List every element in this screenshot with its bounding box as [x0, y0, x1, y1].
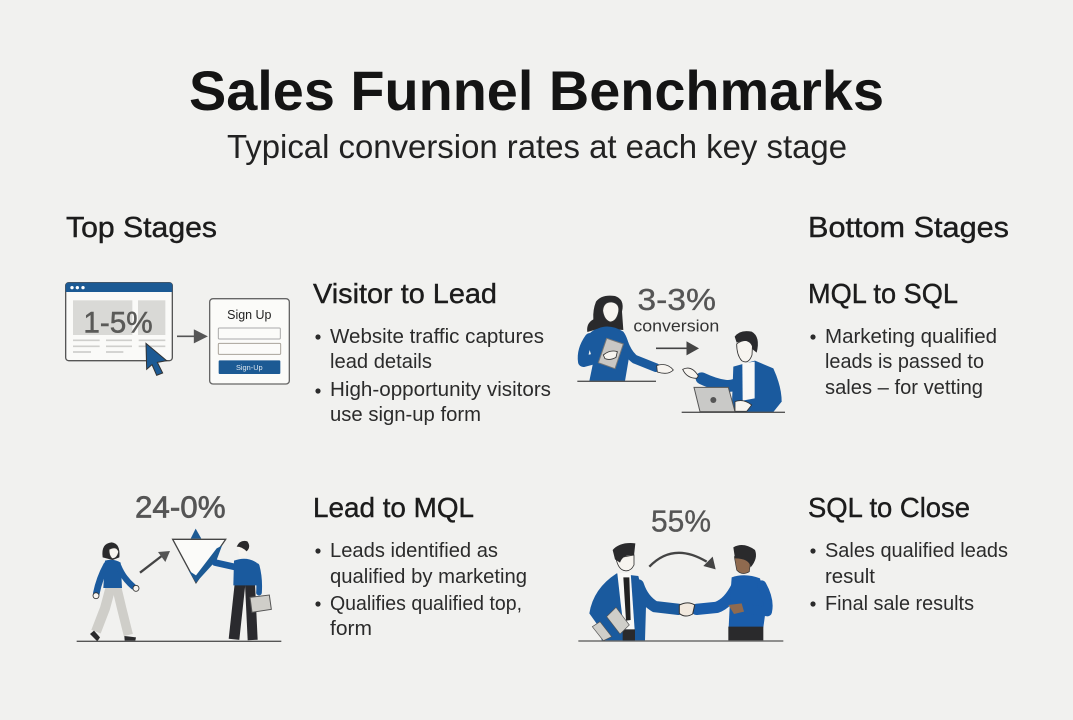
illustration: closing handshake — [578, 505, 783, 641]
text block: SQL to close: result — [825, 565, 875, 588]
text block: visitor to lead: Website traffic captures — [330, 325, 544, 348]
arrow — [177, 331, 206, 342]
text block: SQL to close — [808, 492, 1008, 615]
text block: lead to MQL: Leads identified as — [330, 539, 498, 562]
label: conversion: conversion — [633, 317, 719, 336]
text block: MQL to SQL: Marketing qualified — [825, 325, 997, 348]
icon: cursor — [146, 343, 167, 375]
stat: 3-3%: 3-3% — [637, 283, 716, 317]
text block: SQL to close: Final sale results — [825, 592, 974, 615]
text block: visitor to lead: use sign-up form — [330, 403, 481, 426]
illustration: lead qualification — [77, 490, 281, 641]
woman walking — [90, 542, 139, 641]
text block: lead to MQL: form — [330, 617, 372, 640]
arrow — [656, 343, 697, 354]
man with briefcase — [77, 541, 281, 641]
text block: visitor to lead: High-opportunity visitors — [330, 378, 551, 401]
man figure with laptop — [682, 331, 785, 412]
customer figure — [697, 545, 768, 640]
text block: MQL to SQL: MQL to SQL — [808, 278, 958, 309]
text block: SQL to close: Sales qualified leads — [825, 539, 1008, 562]
sign-up form card: Sign Up — [227, 308, 271, 322]
stat: 1-5%: 1-5% — [83, 307, 153, 340]
illustration: MQL handoff — [577, 283, 785, 412]
text block: SQL to close: SQL to Close — [808, 492, 970, 523]
icon: browser to sign-up form — [66, 283, 289, 384]
sign-up form card: Sign-Up — [236, 363, 263, 372]
text block: visitor to lead: lead details — [330, 350, 432, 373]
subtitle: Typical conversion rates at each key stage — [227, 128, 847, 165]
browser window — [66, 283, 172, 361]
text block: MQL to SQL: leads is passed to — [825, 350, 984, 373]
heading: bottom stages: Bottom Stages — [808, 212, 1009, 244]
handshake — [679, 603, 695, 616]
arrow — [140, 556, 162, 573]
salesman figure — [589, 543, 679, 641]
text block: lead to MQL: Lead to MQL — [313, 492, 474, 523]
text block: visitor to lead — [313, 278, 551, 426]
text block: lead to MQL: qualified by marketing — [330, 565, 527, 588]
woman figure — [577, 296, 673, 381]
text block: MQL to SQL — [808, 278, 997, 399]
funnel with check — [173, 529, 226, 583]
heading: top stages: Top Stages — [66, 212, 217, 244]
stat: 55%: 55% — [651, 505, 711, 539]
text block: visitor to lead: Visitor to Lead — [313, 278, 497, 309]
sign-up form card — [210, 299, 289, 384]
text block: MQL to SQL: sales – for vetting — [825, 376, 983, 399]
text block: lead to MQL — [313, 492, 527, 640]
curved arrow — [649, 553, 707, 567]
stat: 24-0%: 24-0% — [135, 490, 226, 524]
text block: lead to MQL: Qualifies qualified top, — [330, 592, 522, 615]
title: Sales Funnel Benchmarks — [189, 59, 884, 122]
